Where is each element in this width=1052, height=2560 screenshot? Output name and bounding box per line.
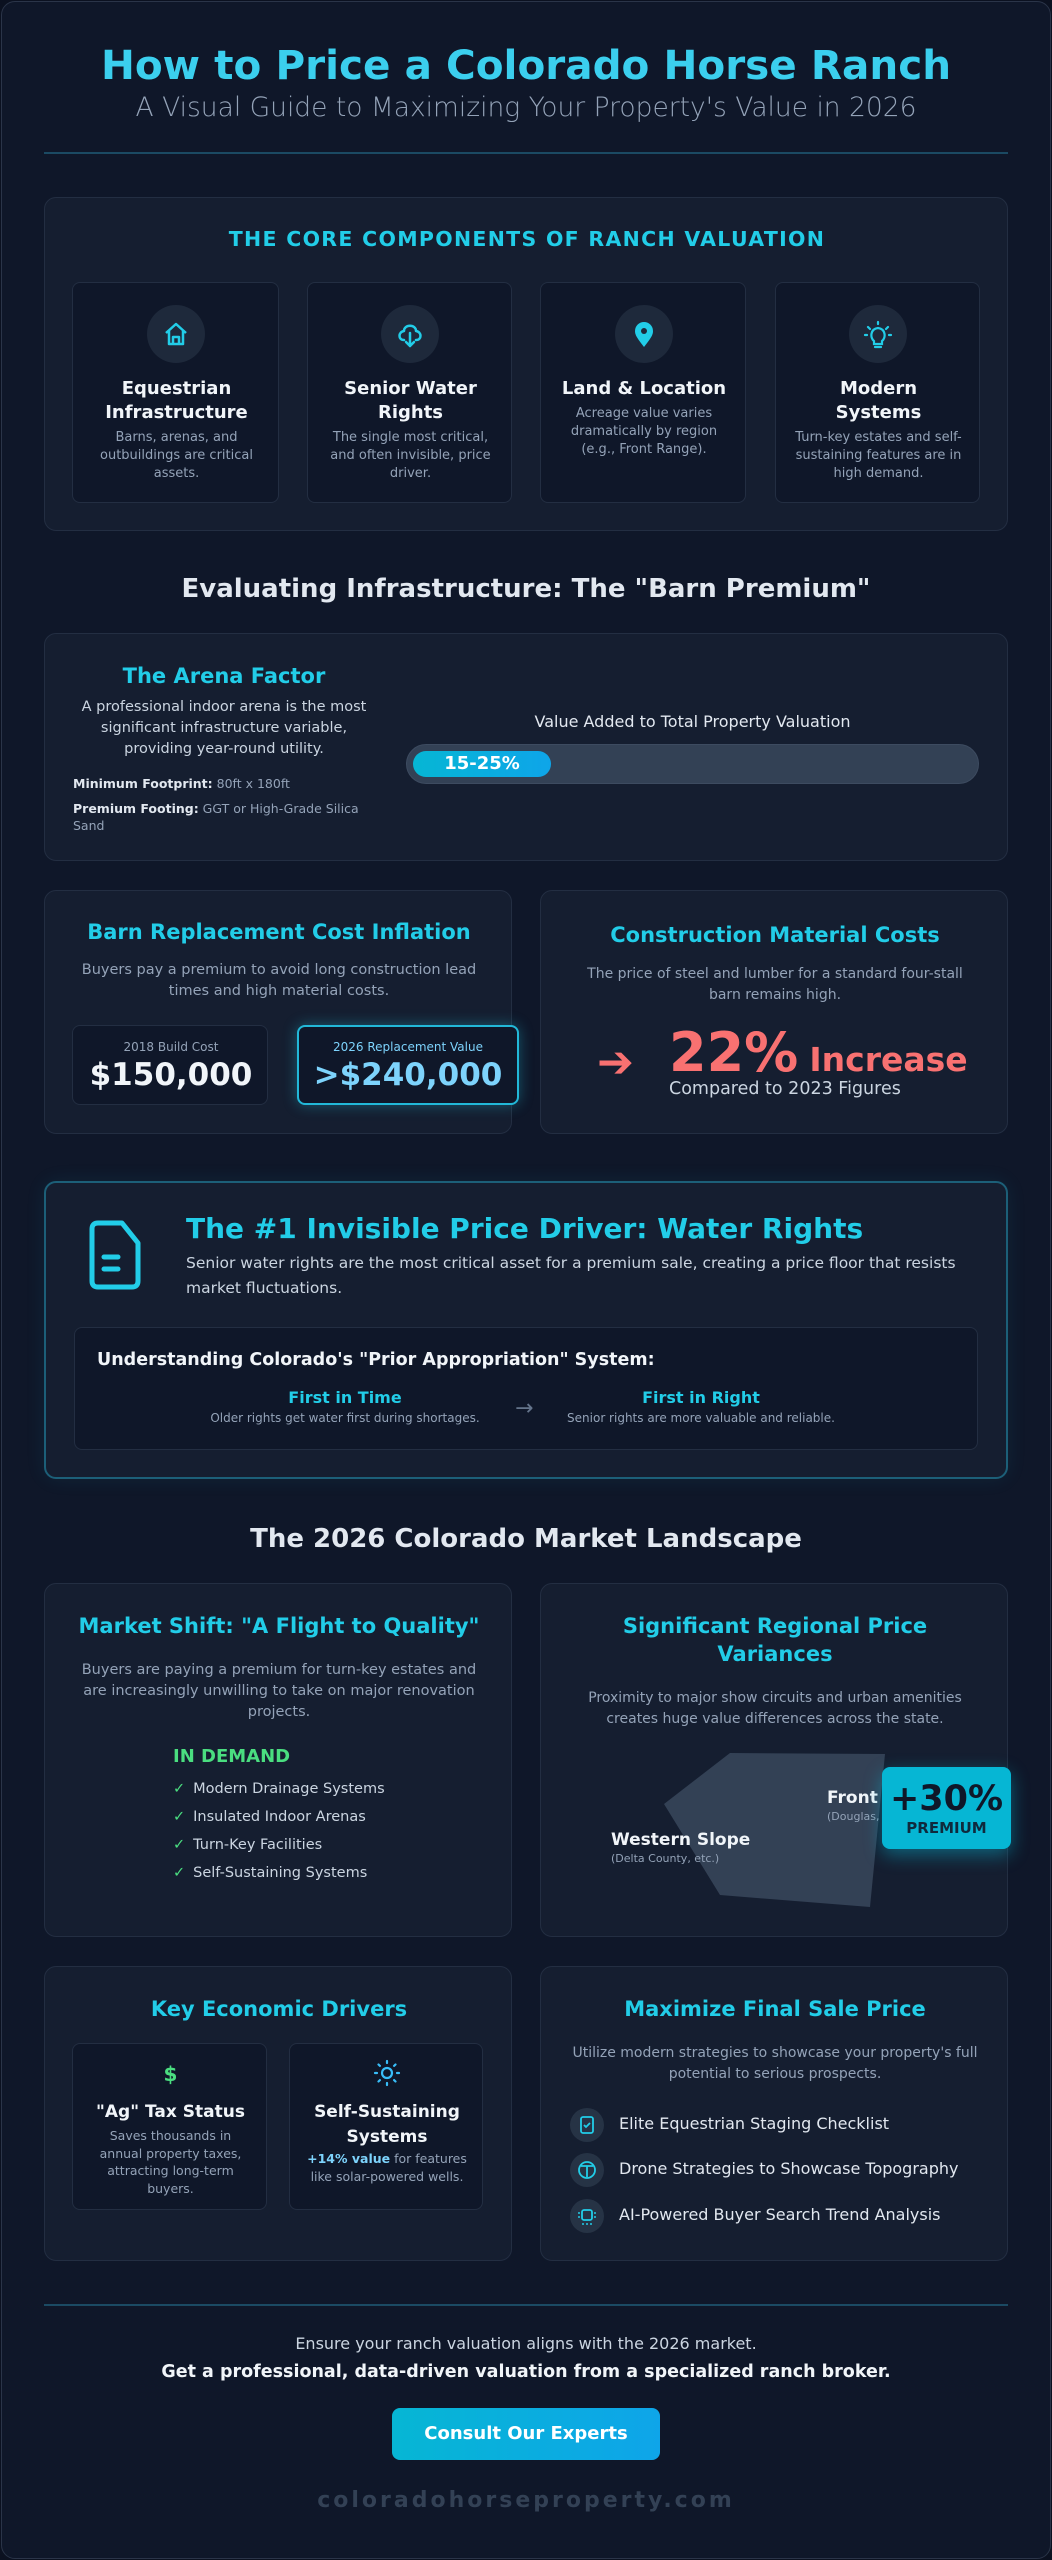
icon: checklist [570,2108,604,2142]
panel: barn replacement cost [44,890,512,1134]
stat: 2026 replacement value: 2026 Replacement Value [333,1040,483,1054]
panel: regional price variances: Proximity to major show circuits and urban amenities creates huge value differences across the state. [588,1690,962,1727]
footer: website: coloradohorseproperty.com [317,2488,735,2513]
card: senior water rights: Rights [378,402,443,423]
card: land & location [540,282,746,503]
icon: arrow: ➔ [597,1037,634,1088]
card: modern systems [775,282,980,503]
first in right: Senior rights are more valuable and reliable. [567,1411,835,1425]
water description: Senior water rights are the most critical asset for a premium sale, creating a price floor that resists market fluctuations. [186,1254,956,1297]
panel: market shift: Market Shift: "A Flight to Quality" [79,1614,479,1638]
icon: lightbulb [849,305,907,363]
stat: 2026 replacement value: >$240,000 [314,1057,502,1093]
card: ag tax status: Saves thousands in annual property taxes, attracting long-term buyers. [100,2128,241,2196]
icon: document [90,1220,140,1290]
callout: +30% premium: +30% [890,1779,1003,1819]
list: in demand: IN DEMAND [173,1746,290,1767]
icon: dollar: $ [164,2062,177,2086]
card: modern systems: Turn-key estates and self-sustaining features are in high demand. [795,430,962,481]
panel: water rights [44,1181,1008,1479]
panel: maximize final sale price: Utilize modern strategies to showcase your property's full potential to serious prospects. [572,2045,978,2082]
card: equestrian infrastructure: Infrastructure [105,402,248,423]
list: strategies [570,2108,958,2233]
water heading: The #1 Invisible Price Driver: Water Rights [186,1212,863,1245]
callout: +30% premium: PREMIUM [906,1819,987,1837]
list: in demand: ✓ Insulated Indoor Arenas [173,1809,366,1825]
arrow: → [515,1396,533,1421]
panel: prior appropriation [74,1327,978,1450]
list: in demand: ✓ Self-Sustaining Systems [173,1865,367,1881]
arena specs: Minimum Footprint: 80ft x 180ft [73,776,290,791]
cta text: Ensure your ranch valuation aligns with the 2026 market. [295,2334,757,2353]
arena specs: Premium Footing: GGT or High-Grade Silica Sand [73,801,359,833]
heading: market landscape: The 2026 Colorado Market Landscape [250,1524,802,1554]
card: self-sustaining systems: +14% value for features like solar-powered wells. [307,2151,467,2184]
card: land & location: Acreage value varies dramatically by region (e.g., Front Range). [571,406,717,457]
list: strategies: Drone Strategies to Showcase Topography [619,2159,958,2178]
card: equestrian infrastructure: Equestrian [122,378,231,399]
arena description: A professional indoor arena is the most significant infrastructure variable, providing year-round utility. [82,699,366,757]
panel: market shift [44,1583,512,1937]
card: self-sustaining systems: Systems [347,2127,427,2147]
map: colorado regions: Western Slope [611,1830,750,1850]
list: in demand: ✓ Turn-Key Facilities [173,1837,322,1853]
bar chart: value added: 15-25% [444,753,520,774]
panel: construction material costs [540,890,1008,1134]
panel: construction material costs: Construction Material Costs [610,923,940,947]
panel: regional price variances: Variances [717,1642,833,1666]
cta text [161,2334,891,2382]
card: self-sustaining systems [289,2043,483,2210]
title: How to Price a Colorado Horse Ranch [101,41,951,89]
heading: core components: THE CORE COMPONENTS OF RANCH VALUATION [229,227,825,251]
map: colorado regions: (Douglas, Elbert) [827,1810,920,1823]
card: equestrian infrastructure [72,282,279,503]
panel: barn replacement cost: Buyers pay a premium to avoid long construction lead times and high material costs. [82,962,476,999]
subtitle: A Visual Guide to Maximizing Your Property's Value in 2026 [136,92,916,123]
panel: key economic drivers [44,1966,512,2261]
icon: sun [374,2060,400,2086]
callout: +30% premium [882,1767,1011,1849]
stat: 22% increase: 22% Increase [669,1021,968,1084]
list: strategies: Elite Equestrian Staging Checklist [619,2114,889,2133]
card: self-sustaining systems: Self-Sustaining [314,2102,460,2122]
map: colorado regions: (Delta County, etc.) [611,1852,719,1865]
stat: 22% increase: Compared to 2023 Figures [669,1079,901,1099]
stat: 2018 build cost: $150,000 [90,1057,252,1093]
panel: maximize final sale price: Maximize Final Sale Price [624,1997,926,2021]
heading: barn premium: Evaluating Infrastructure: The "Barn Premium" [182,574,870,604]
panel: construction material costs: The price of steel and lumber for a standard four-stall barn remains high. [587,966,963,1003]
icon: drone [570,2153,604,2187]
button: consult our experts: Consult Our Experts [424,2423,628,2444]
stat: 2018 build cost [72,1025,268,1105]
arena heading: The Arena Factor [123,664,325,688]
stat: 2018 build cost: 2018 Build Cost [124,1040,218,1054]
bar chart: value added [406,712,979,784]
map: colorado regions: Front Range [827,1788,944,1808]
card: modern systems: Systems [836,402,921,423]
card: senior water rights [307,282,512,503]
icon: map pin [615,305,673,363]
first in right [567,1388,835,1425]
panel: regional price variances [540,1583,1008,1937]
panel: market shift: Buyers are paying a premium for turn-key estates and are increasingly unwilling to take on major renovation projects. [82,1662,476,1720]
icon: ai chip [570,2199,604,2233]
panel: prior appropriation: Understanding Colorado's "Prior Appropriation" System: [97,1350,655,1370]
first in time: First in Time [288,1388,402,1407]
icon: cloud download [381,305,439,363]
bar chart: value added: Value Added to Total Property Valuation [534,712,851,731]
panel: core components [44,197,1008,531]
panel: arena factor [44,633,1008,861]
cta text: Get a professional, data-driven valuation from a specialized ranch broker. [161,2362,891,2382]
button: consult our experts [392,2408,660,2460]
first in time: Older rights get water first during shortages. [210,1411,480,1425]
card: ag tax status [72,2043,267,2210]
first in right: First in Right [642,1388,760,1407]
list: strategies: AI-Powered Buyer Search Trend Analysis [619,2205,940,2224]
panel: key economic drivers: Key Economic Drivers [151,1997,407,2021]
first in time [210,1388,480,1425]
icon: house [147,305,205,363]
panel: regional price variances: Significant Regional Price [623,1614,927,1638]
card: senior water rights: The single most critical, and often invisible, price driver. [330,430,491,481]
panel: barn replacement cost: Barn Replacement Cost Inflation [87,920,471,944]
card: senior water rights: Senior Water [344,378,477,399]
card: land & location: Land & Location [562,378,726,399]
stat: 2026 replacement value [297,1025,519,1105]
list: in demand [173,1746,385,1881]
arena specs [73,776,359,833]
list: in demand: ✓ Modern Drainage Systems [173,1781,385,1797]
card: modern systems: Modern [840,378,917,399]
map: colorado regions [611,1753,944,1907]
panel: maximize final sale price [540,1966,1008,2261]
card: equestrian infrastructure: Barns, arenas, and outbuildings are critical assets. [100,430,253,481]
card: ag tax status: "Ag" Tax Status [96,2102,245,2122]
